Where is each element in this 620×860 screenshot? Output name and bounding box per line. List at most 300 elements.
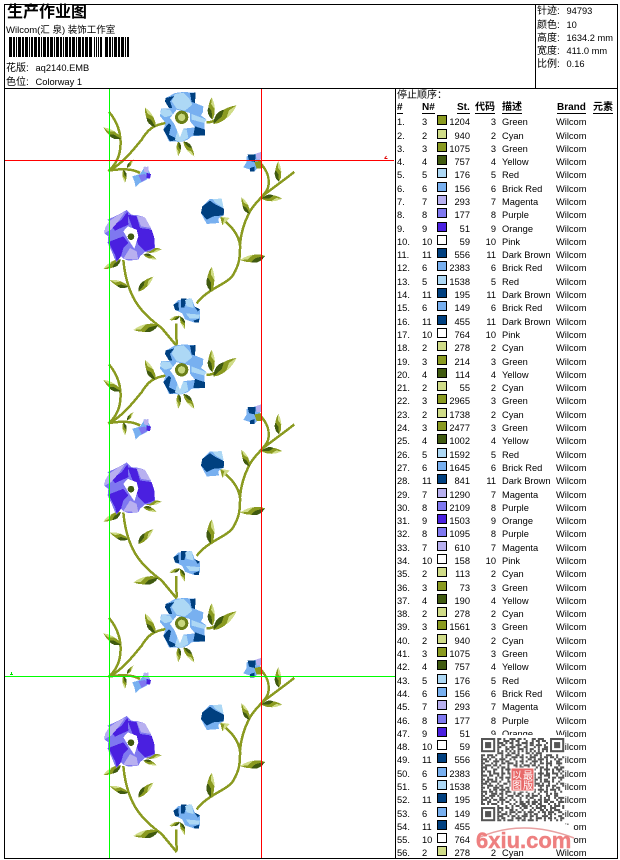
stats: stitches: 针迹: (537, 6, 560, 17)
stats: stitches: 94793 (566, 6, 592, 16)
stop sequence table rows: Wilcom (556, 130, 586, 140)
stop sequence table rows: 6 (422, 184, 427, 194)
stop sequence table rows: 53. (397, 808, 410, 818)
stop sequence table rows: 3 (422, 356, 427, 366)
stop sequence table rows: 10 (422, 237, 432, 247)
QR centre seal: 图 (512, 780, 522, 792)
stop sequence table rows: 3 (422, 117, 427, 127)
stop sequence table rows: 6 (422, 303, 427, 313)
stop sequence table rows: 45. (397, 702, 410, 712)
stop sequence table rows: Red (502, 170, 519, 180)
stop sequence table rows: Wilcom (556, 356, 586, 366)
stop sequence table rows: 2 (422, 636, 427, 646)
stop sequence table rows: Dark Brown (502, 755, 551, 765)
stop sequence table rows: 34. (397, 556, 410, 566)
stop sequence table rows: 3. (397, 144, 405, 154)
stop sequence table rows: 25. (397, 436, 410, 446)
stop sequence table rows: 10 (422, 330, 432, 340)
stop sequence table rows: 1002 (449, 436, 470, 446)
table header row (397, 101, 613, 114)
stop sequence table rows: 278 (454, 848, 470, 858)
stop sequence table rows: 29. (397, 490, 410, 500)
stop sequence table rows: 7 (491, 197, 496, 207)
stop sequence table rows: 41. (397, 649, 410, 659)
stop sequence table rows: 1075 (449, 649, 470, 659)
stop sequence table rows: 54. (397, 822, 410, 832)
stop sequence table rows: 8 (491, 529, 496, 539)
stats: width: 411.0 mm (566, 46, 607, 56)
stop sequence table rows: Cyan (502, 848, 524, 858)
stop sequence table rows: 15. (397, 303, 410, 313)
stop sequence table rows: Wilcom (556, 582, 586, 592)
stop sequence table rows: Wilcom (556, 689, 586, 699)
stats: width (537, 45, 607, 57)
stop sequence table rows: 37. (397, 596, 410, 606)
stop sequence table rows: Wilcom (556, 277, 586, 287)
stop sequence table rows: 293 (454, 197, 470, 207)
stop sequence table rows: 455 (454, 822, 470, 832)
stop sequence table rows: 156 (454, 184, 470, 194)
stop sequence table rows: 9 (422, 729, 427, 739)
stop sequence table rows: 149 (454, 303, 470, 313)
stop sequence table rows: 2 (422, 130, 427, 140)
stop sequence table rows: Wilcom (556, 662, 586, 672)
stop sequence table rows: 764 (454, 330, 470, 340)
stop sequence table rows: 30. (397, 503, 410, 513)
stop sequence table rows: Red (502, 277, 519, 287)
stop sequence table rows: 176 (454, 676, 470, 686)
stop sequence table rows: 6 (491, 184, 496, 194)
stop sequence table rows: 1095 (449, 529, 470, 539)
stop sequence table rows: Wilcom (556, 330, 586, 340)
stop sequence table rows: 52. (397, 795, 410, 805)
stop sequence table rows: Brick Red (502, 263, 542, 273)
stop sequence table rows: 940 (454, 636, 470, 646)
stop sequence table rows: Wilcom (556, 503, 586, 513)
stop sequence table rows: Purple (502, 210, 529, 220)
stop sequence table rows: 16. (397, 317, 410, 327)
stop sequence table rows: 1075 (449, 144, 470, 154)
table header row: Brand (557, 102, 586, 113)
stop sequence table rows (397, 115, 586, 858)
stop sequence table rows: 1592 (449, 450, 470, 460)
stop sequence table rows: Green (502, 423, 528, 433)
stop sequence table rows: 5 (491, 450, 496, 460)
stop sequence table rows: 47. (397, 729, 410, 739)
stop sequence table rows: Green (502, 144, 528, 154)
stats: colours (537, 19, 577, 31)
stop sequence table rows: 278 (454, 343, 470, 353)
stop sequence table rows: 46. (397, 716, 410, 726)
stop sequence table rows: 3 (491, 396, 496, 406)
stop sequence table rows: Cyan (502, 383, 524, 393)
stop sequence table rows: 2 (422, 383, 427, 393)
stop sequence table rows: 3 (422, 622, 427, 632)
stop sequence table rows: 49. (397, 755, 410, 765)
stop sequence table rows: Wilcom (556, 729, 586, 739)
stop sequence table rows: 18. (397, 343, 410, 353)
stop sequence table rows: Orange (502, 729, 533, 739)
stop sequence table rows: Wilcom (556, 622, 586, 632)
stop sequence table rows: 8. (397, 210, 405, 220)
stop sequence table rows: Green (502, 117, 528, 127)
stop sequence table rows: 11 (486, 476, 496, 486)
stop sequence table rows: 1738 (449, 410, 470, 420)
stop sequence table rows: Wilcom (556, 808, 586, 818)
stop sequence table rows: 757 (454, 662, 470, 672)
stop sequence table rows: 7 (491, 543, 496, 553)
stop sequence table rows: 2965 (449, 396, 470, 406)
stop sequence table rows: 7 (491, 490, 496, 500)
stop sequence table rows: 26. (397, 450, 410, 460)
stop sequence table rows: Brick Red (502, 769, 542, 779)
stop sequence table rows: 6. (397, 184, 405, 194)
stop sequence table rows: Wilcom (556, 224, 586, 234)
stop sequence table rows: 73 (460, 582, 470, 592)
stop sequence table rows: 44. (397, 689, 410, 699)
stop sequence table rows: 5 (422, 782, 427, 792)
table header row: St. (457, 102, 470, 113)
stop sequence table rows: 3 (422, 423, 427, 433)
stop sequence table rows: 195 (454, 795, 470, 805)
stop sequence table rows: 35. (397, 569, 410, 579)
stop sequence table rows: Cyan (502, 130, 524, 140)
stop sequence table rows: 5 (491, 782, 496, 792)
stop sequence table rows: 27. (397, 463, 410, 473)
stop sequence table rows: 455 (454, 317, 470, 327)
stop sequence table rows: 9 (491, 729, 496, 739)
stop sequence table rows: 3 (491, 649, 496, 659)
stop sequence table rows: Cyan (502, 343, 524, 353)
stop sequence table rows: 11 (422, 755, 432, 765)
stop sequence table rows: Red (502, 450, 519, 460)
stop sequence table rows: 556 (454, 755, 470, 765)
stop sequence table rows: 5 (422, 450, 427, 460)
stop sequence table rows: 8 (491, 503, 496, 513)
stop sequence table rows: Magenta (502, 490, 538, 500)
stop sequence table rows: Wilcom (556, 370, 586, 380)
stop sequence table rows: Green (502, 582, 528, 592)
stop sequence table rows: Red (502, 782, 519, 792)
stop sequence table rows: Wilcom (556, 144, 586, 154)
stop sequence table rows: 13. (397, 277, 410, 287)
stop sequence table rows: Purple (502, 503, 529, 513)
stats: scale (537, 58, 585, 70)
stop sequence table rows: Wilcom (556, 184, 586, 194)
stop sequence table rows: 2 (491, 609, 496, 619)
stop sequence table rows: 278 (454, 609, 470, 619)
stop sequence table rows: 4 (422, 662, 427, 672)
stop sequence table rows: 11 (422, 290, 432, 300)
stop sequence table rows: 10 (486, 330, 496, 340)
stop sequence table rows: Wilcom (556, 835, 586, 845)
stop sequence table rows: 3 (491, 356, 496, 366)
stop sequence table rows: Wilcom (556, 250, 586, 260)
stop sequence table rows: 28. (397, 476, 410, 486)
stop sequence table rows: 33. (397, 543, 410, 553)
stop sequence table rows: 21. (397, 383, 410, 393)
stop sequence table rows: 195 (454, 290, 470, 300)
table header row: 代码 (475, 102, 495, 113)
stop sequence table rows: Pink (502, 556, 520, 566)
motif repeat 2 (101, 344, 294, 598)
stop sequence table rows: 2 (491, 410, 496, 420)
stop sequence table rows: Wilcom (556, 210, 586, 220)
stop sequence table rows: 40. (397, 636, 410, 646)
stop sequence table rows: 9 (422, 516, 427, 526)
stop sequence table rows: 9 (491, 516, 496, 526)
green start marker (10, 672, 13, 675)
stop sequence table rows: 6 (491, 689, 496, 699)
stop sequence table rows: 1204 (449, 117, 470, 127)
stop sequence table rows: 2 (422, 569, 427, 579)
stop sequence table rows: 12. (397, 263, 410, 273)
QR centre seal: 版 (523, 779, 533, 792)
stop sequence table rows: 3 (491, 582, 496, 592)
stop sequence table rows: 10 (486, 556, 496, 566)
stop sequence table rows: Wilcom (556, 782, 586, 792)
stop sequence table rows: Wilcom (556, 263, 586, 273)
stop sequence table rows: Wilcom (556, 556, 586, 566)
stop sequence table rows: 10 (422, 835, 432, 845)
stop sequence table rows: 176 (454, 170, 470, 180)
stop sequence table rows: 43. (397, 676, 410, 686)
stop sequence table rows: 1538 (449, 782, 470, 792)
stop sequence table rows: Wilcom (556, 822, 586, 832)
stop sequence table rows: 11 (486, 290, 496, 300)
stop sequence table rows: 190 (454, 596, 470, 606)
stop sequence table rows: Wilcom (556, 769, 586, 779)
stop sequence table rows: Magenta (502, 197, 538, 207)
stop sequence table rows: 4 (491, 370, 496, 380)
stop sequence table rows: Purple (502, 529, 529, 539)
stop sequence table rows: 55 (460, 383, 470, 393)
stop sequence table rows: Magenta (502, 543, 538, 553)
stop sequence table rows: 4 (491, 596, 496, 606)
stop sequence table rows: 3 (491, 144, 496, 154)
stop sequence table rows: 114 (455, 370, 470, 380)
stop sequence table rows: 22. (397, 396, 410, 406)
stop sequence table rows: 3 (422, 582, 427, 592)
stop sequence table rows: 10. (397, 237, 410, 247)
stop sequence table rows: 3 (422, 144, 427, 154)
stop sequence table rows: 156 (454, 689, 470, 699)
stop sequence table rows: 3 (491, 423, 496, 433)
stop sequence table rows: 55. (397, 835, 410, 845)
stop sequence table rows: 8 (422, 210, 427, 220)
QR centre seal: 以 (512, 771, 522, 782)
stop sequence table rows: 6 (491, 303, 496, 313)
stop sequence table rows: 48. (397, 742, 410, 752)
stop sequence table rows: 9 (491, 224, 496, 234)
stop sequence table rows: 11 (422, 822, 432, 832)
stop sequence table rows: 11. (397, 250, 409, 260)
stop sequence table rows: 293 (454, 702, 470, 712)
stop sequence table rows: 6 (422, 769, 427, 779)
stop sequence table rows: 149 (454, 808, 470, 818)
stop sequence table rows: 4 (491, 662, 496, 672)
header: colorway (6, 76, 82, 88)
stop sequence table rows: Green (502, 356, 528, 366)
stop sequence table rows: Wilcom (556, 303, 586, 313)
stop sequence table rows: 11 (422, 476, 432, 486)
stop sequence table rows: Wilcom (556, 609, 586, 619)
header: design file: 花版: (6, 63, 29, 74)
table header row: 元素 (593, 102, 613, 113)
stop sequence table rows: 8 (422, 503, 427, 513)
stop sequence table rows: Yellow (502, 436, 529, 446)
stop sequence table rows: Brick Red (502, 303, 542, 313)
stop sequence table rows: Orange (502, 516, 533, 526)
stop sequence table rows: 158 (454, 556, 470, 566)
stop sequence table rows: 7 (422, 702, 427, 712)
stats: width: 宽度: (537, 46, 560, 57)
stop sequence table rows: 113 (455, 569, 470, 579)
stop sequence table rows: Wilcom (556, 410, 586, 420)
stop sequence table rows: Wilcom (556, 396, 586, 406)
stop sequence table rows: Brick Red (502, 463, 542, 473)
stop sequence table rows: 841 (454, 476, 470, 486)
stop sequence table rows: 56. (397, 848, 410, 858)
stop sequence table rows: 4 (422, 157, 427, 167)
stop sequence table rows: 2 (491, 636, 496, 646)
stop sequence table rows: 6 (491, 463, 496, 473)
stop sequence table rows: 2383 (449, 769, 470, 779)
stop sequence table rows: 2 (422, 410, 427, 420)
stop sequence table rows: Wilcom (556, 676, 586, 686)
stop sequence table rows: Green (502, 396, 528, 406)
stop sequence table rows: 11 (422, 317, 432, 327)
stop sequence table rows: Purple (502, 716, 529, 726)
stop sequence table rows: Wilcom (556, 848, 586, 858)
stop sequence table rows: 5 (422, 277, 427, 287)
stop sequence table rows: 10 (486, 835, 496, 845)
stop sequence table rows: Wilcom (556, 450, 586, 460)
stop sequence table rows: 5 (491, 170, 496, 180)
stop sequence table rows: 3 (491, 622, 496, 632)
header: colorway: Colorway 1 (36, 77, 82, 87)
stop sequence table rows: 2 (491, 848, 496, 858)
stop sequence table rows: Red (502, 676, 519, 686)
stop sequence table rows: Dark Brown (502, 795, 551, 805)
stop sequence table rows: Brick Red (502, 689, 542, 699)
stop sequence table rows: 2 (422, 609, 427, 619)
stop sequence table rows: 5 (491, 277, 496, 287)
stop sequence table rows: Wilcom (556, 476, 586, 486)
stop sequence table rows: 3 (491, 117, 496, 127)
stop sequence table rows: 6 (422, 808, 427, 818)
stop sequence table rows: 9 (422, 224, 427, 234)
stop sequence table rows: 1503 (449, 516, 470, 526)
stop sequence table rows: 20. (397, 370, 410, 380)
stop sequence table rows: 2 (491, 130, 496, 140)
stop sequence table rows: 2 (491, 383, 496, 393)
stop sequence table rows: 11 (486, 822, 496, 832)
stop sequence table rows: Dark Brown (502, 290, 551, 300)
stats: stitches (537, 5, 592, 17)
stop sequence table rows: 2 (491, 343, 496, 353)
red stop marker (384, 156, 388, 158)
stop sequence table rows: Pink (502, 835, 520, 845)
stop sequence table rows: 5. (397, 170, 405, 180)
stats: height: 高度: (537, 33, 560, 44)
stop sequence heading: 停止顺序： (397, 90, 447, 101)
stop sequence table rows: Wilcom (556, 317, 586, 327)
QR code (481, 739, 564, 820)
stop sequence table rows: Dark Brown (502, 317, 551, 327)
stop sequence table rows: 1645 (449, 463, 470, 473)
header: design file: aq2140.EMB (36, 63, 89, 73)
stats: scale: 比例: (537, 59, 560, 70)
stop sequence table rows: Yellow (502, 157, 529, 167)
stop sequence table rows: 2 (491, 569, 496, 579)
stop sequence table rows: 5 (422, 676, 427, 686)
stop sequence table rows: 24. (397, 423, 410, 433)
stop sequence table rows: 2109 (449, 503, 470, 513)
stop sequence table rows: Cyan (502, 609, 524, 619)
stop sequence table rows: Wilcom (556, 343, 586, 353)
stop sequence table rows: 2477 (449, 423, 470, 433)
stop sequence table rows: 2 (422, 343, 427, 353)
stop sequence table rows: 4 (422, 436, 427, 446)
stop sequence table rows: 3 (422, 649, 427, 659)
stop sequence table rows: 6 (422, 263, 427, 273)
stop sequence table rows: 7 (422, 490, 427, 500)
stop sequence table rows: Wilcom (556, 649, 586, 659)
table header row: 描述 (502, 102, 522, 113)
stop sequence table rows: 50. (397, 769, 410, 779)
stop sequence table rows: 7 (491, 702, 496, 712)
QR centre seal: 最 (523, 770, 533, 782)
stop sequence table rows: 7. (397, 197, 405, 207)
stop sequence table rows: 11 (422, 795, 432, 805)
stop sequence table rows: Wilcom (556, 529, 586, 539)
stop sequence table rows: 10 (486, 742, 496, 752)
QR centre seal (511, 768, 534, 792)
stop sequence table rows: 2383 (449, 263, 470, 273)
stop sequence table rows: 1538 (449, 277, 470, 287)
stop sequence table rows: 4 (422, 370, 427, 380)
stop sequence table rows: 23. (397, 410, 410, 420)
stop sequence table rows: 10 (422, 556, 432, 566)
stats: colours: 颜色: (537, 20, 560, 31)
motif repeat 3 (101, 598, 294, 852)
stop sequence table rows: 4 (491, 436, 496, 446)
stop sequence table rows: Wilcom (556, 636, 586, 646)
stop sequence table rows: 6 (491, 263, 496, 273)
stop sequence table rows: 1290 (449, 490, 470, 500)
stop sequence table rows: Pink (502, 742, 520, 752)
stop sequence table rows: 8 (491, 210, 496, 220)
stop sequence table rows: 51 (460, 729, 470, 739)
stop sequence table rows: Wilcom (556, 516, 586, 526)
stop sequence table rows: 8 (422, 529, 427, 539)
stop sequence table rows: 31. (397, 516, 410, 526)
stop sequence table rows: 59 (460, 742, 470, 752)
stop sequence table rows: 11 (486, 250, 496, 260)
motif repeat 1 (101, 92, 294, 346)
stop sequence table rows: Wilcom (556, 290, 586, 300)
stop sequence table rows: Magenta (502, 702, 538, 712)
horizontal red stop line (4, 160, 394, 161)
stop sequence table rows: Green (502, 622, 528, 632)
stop sequence table rows: 39. (397, 622, 410, 632)
stop sequence table rows: Wilcom (556, 197, 586, 207)
stats: colours: 10 (566, 20, 577, 30)
stop sequence table rows: 38. (397, 609, 410, 619)
stop sequence table rows: Wilcom (556, 742, 586, 752)
stop sequence table rows: 4. (397, 157, 405, 167)
